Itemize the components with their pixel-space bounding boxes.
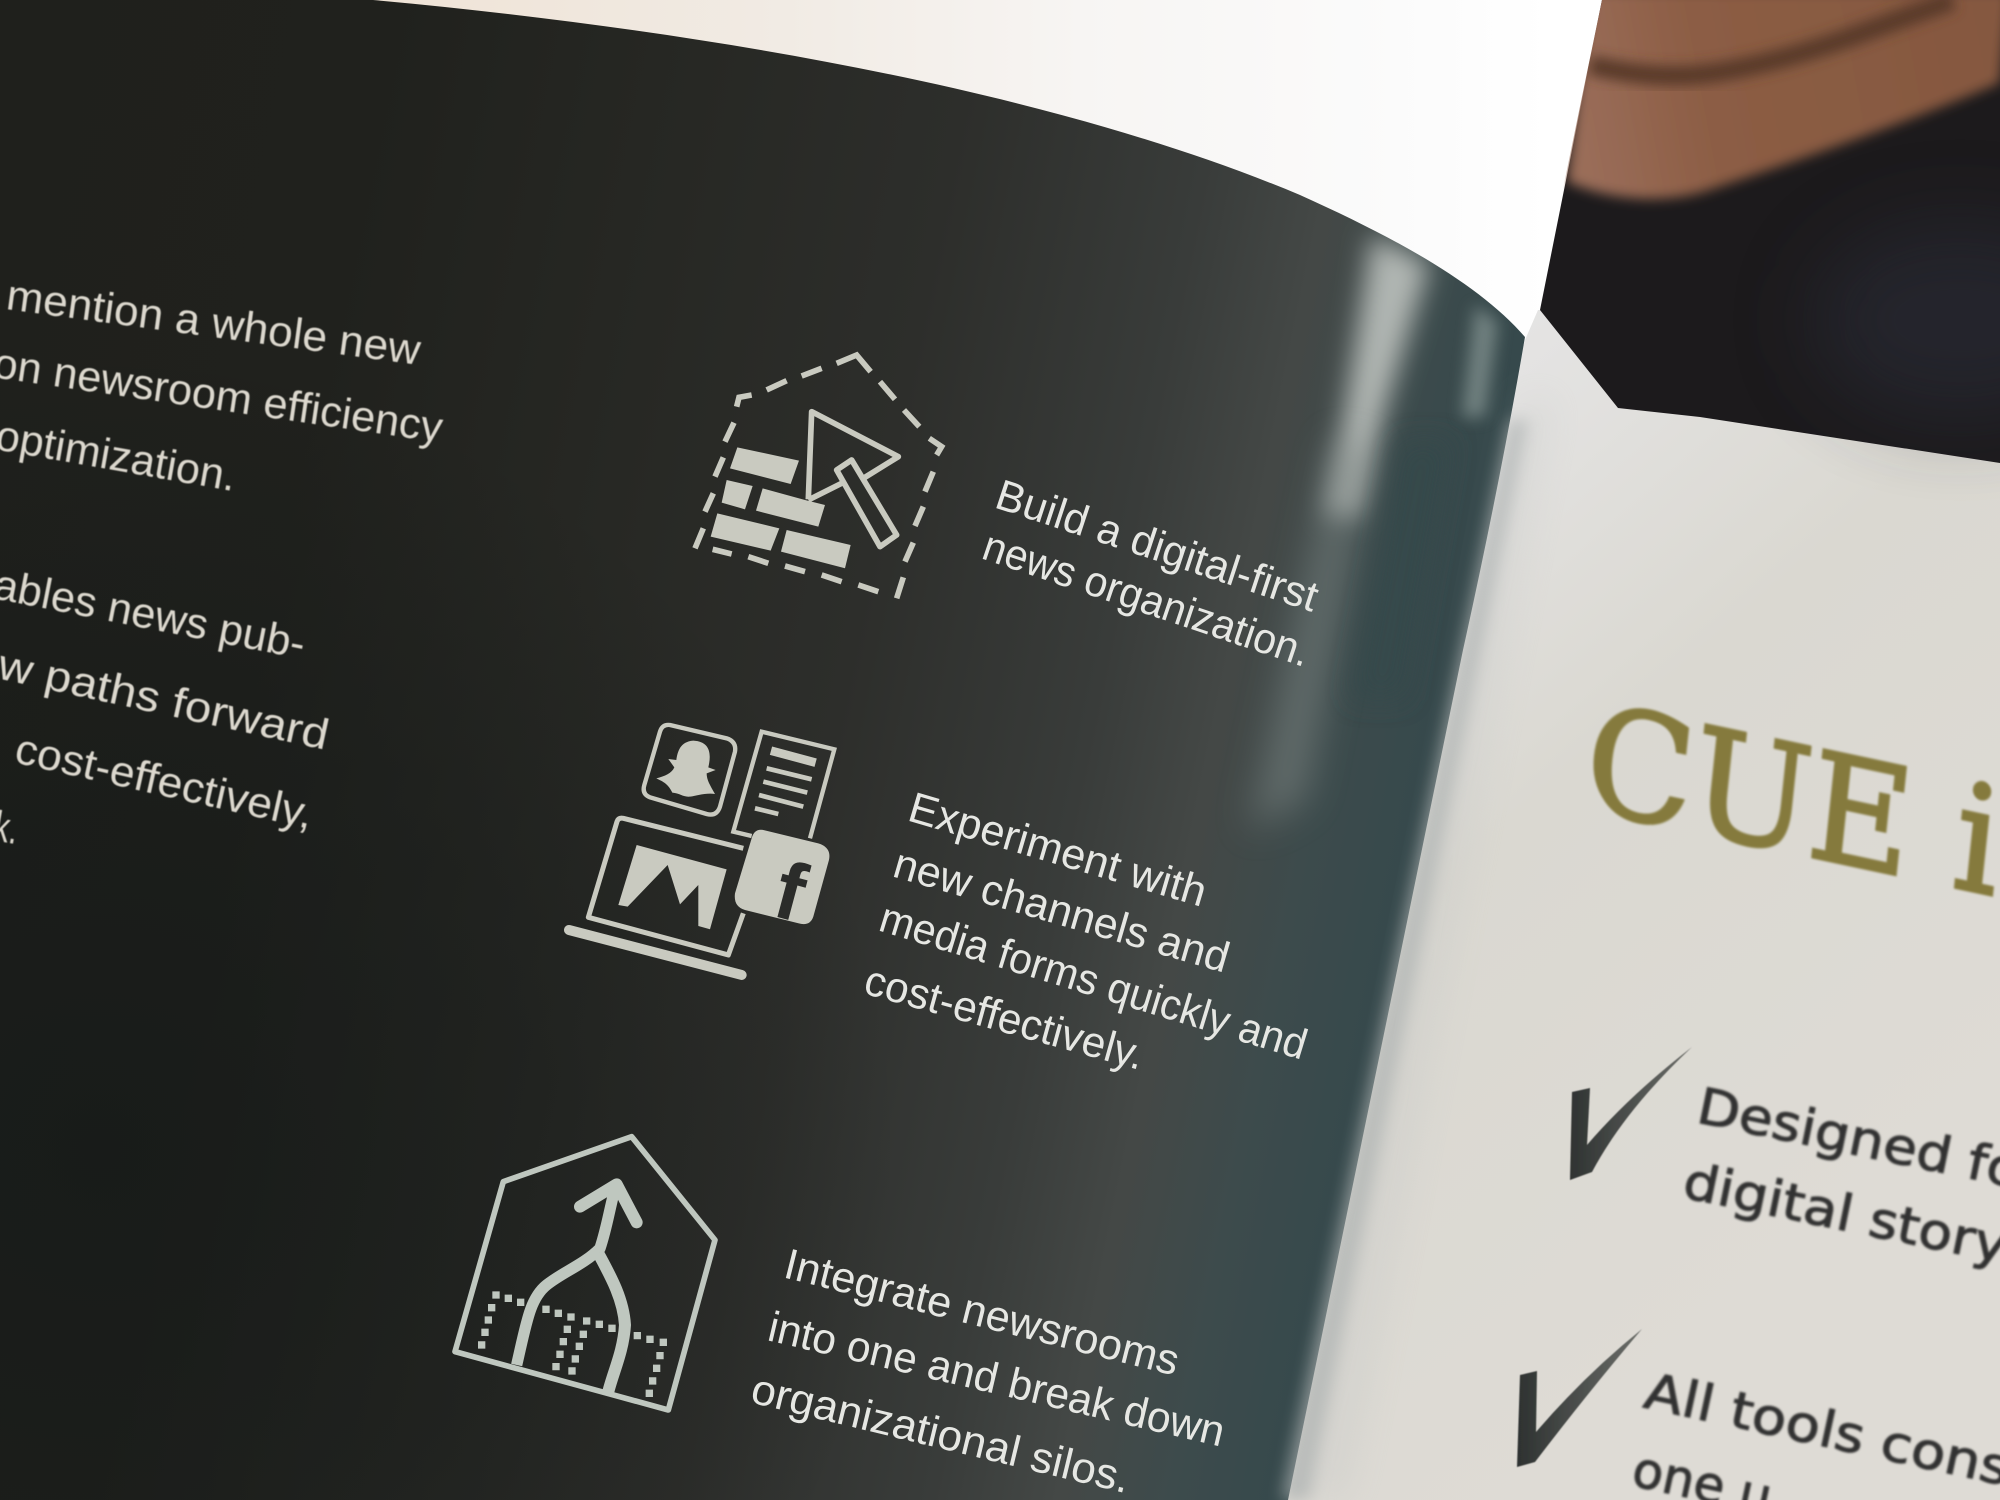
dark page panel [0,0,1600,1500]
line: media forms quickly and [874,894,1313,1069]
dashed house outline [695,355,942,598]
lower highlight fade [1250,440,1372,830]
line: Integrate newsrooms [780,1240,1184,1385]
text: build [977,471,1324,677]
photo on right page [1540,0,2000,463]
house outline [455,1137,715,1410]
line: All tools cons [1639,1362,2000,1497]
check mark 2 [1517,1329,1642,1467]
facebook tile [735,830,829,924]
bricks [711,447,851,568]
main highlight [1326,235,1430,517]
icon: merging newsrooms house [455,1137,715,1410]
text line 1: mention a whole new [4,271,424,375]
icon: channels and media [569,725,834,975]
line: Build a digital-first [990,471,1324,621]
text line 5: w paths forward [0,641,333,760]
check mark 1 [1570,1047,1692,1180]
laptop screen [588,818,743,955]
photo blue tint [1810,220,2000,420]
gutter shadow [1312,400,1550,1500]
line: new channels and [888,840,1235,982]
line: news organization. [977,522,1316,677]
snapchat ghost [656,741,716,797]
snapchat tile [644,725,735,815]
text line 2: on newsroom efficiency [0,339,446,452]
left column text [0,271,446,854]
text: experiment [859,784,1313,1080]
gutter edge fade [1282,420,1528,1500]
trowel handle [837,460,897,547]
merging arrow [517,1184,637,1392]
text: integrate [747,1240,1229,1500]
check text 2 [1627,1362,2000,1500]
laptop base [569,930,742,975]
laptop image [618,845,727,929]
lower shading [0,300,1000,1500]
right page paper [1200,310,2000,1500]
line: Experiment with [903,784,1212,917]
icon: trowel and bricks in dashed house [695,355,942,598]
facebook f: f [765,844,816,940]
line: cost-effectively. [859,956,1150,1080]
line: digital story [1679,1152,2000,1275]
dotted silo lines [482,1295,663,1393]
photo skin tones [1567,0,2000,199]
teal band [1350,440,1452,700]
top white page [0,0,1640,345]
trowel blade [808,412,898,500]
text line 6: cost-effectively, [11,725,318,839]
check text 1 [1679,1077,2000,1275]
second highlight [1462,305,1498,417]
document [733,732,834,838]
line: into one and break down [764,1303,1229,1456]
line: organizational silos. [747,1365,1135,1500]
